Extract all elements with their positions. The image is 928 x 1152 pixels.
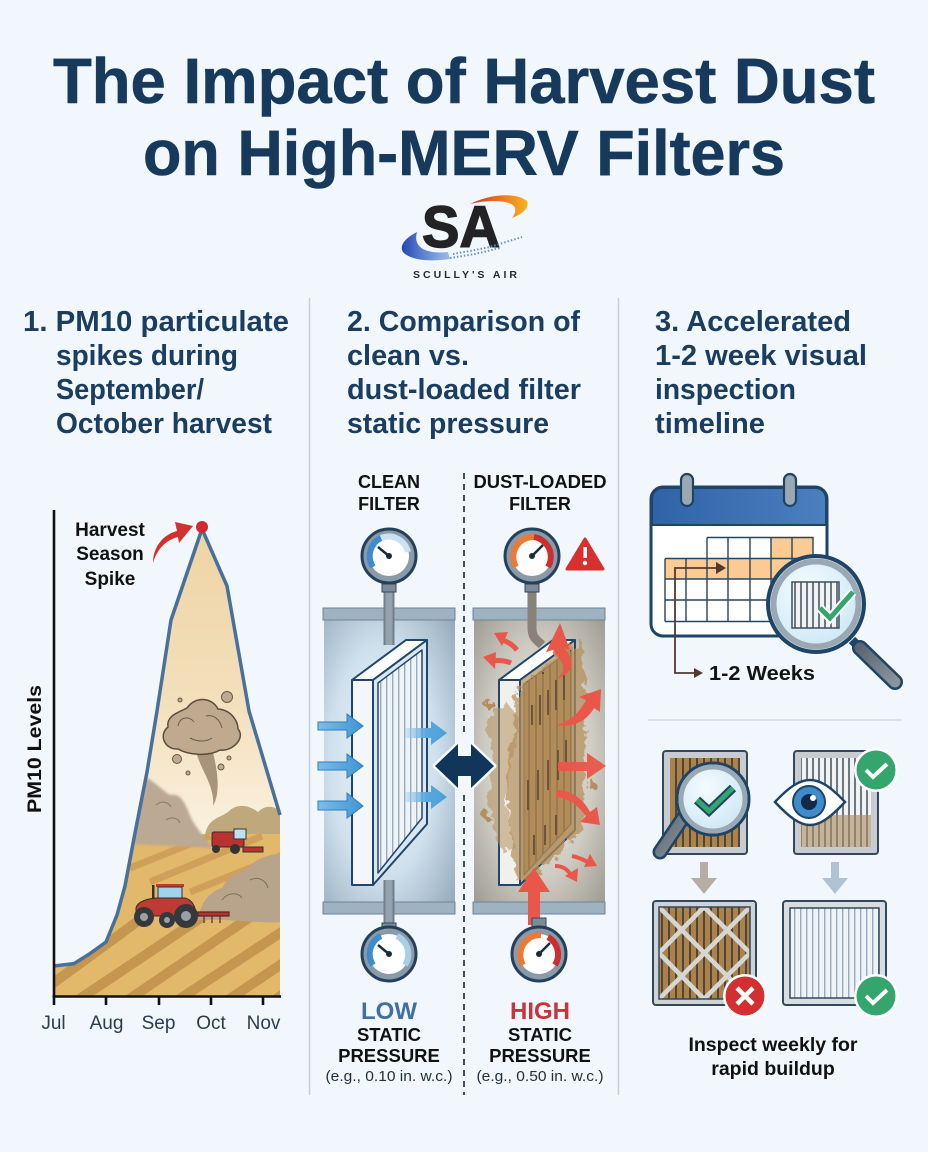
label: clean filter: FILTER [358,494,420,514]
axes [52,510,281,1005]
heading: column 2 [347,306,581,440]
icon: check badge [854,748,898,792]
double arrow: comparison [435,744,494,788]
clean filter [352,640,427,885]
gauge: clean bottom [362,923,416,981]
peak marker [196,521,208,533]
month labels: Jul [41,1013,66,1034]
label: low static pressure [326,998,452,1085]
label: low static pressure: LOW [361,998,417,1025]
icon: magnifier with filter [768,556,895,682]
column dividers [310,298,618,1095]
label: high static pressure: HIGH [510,998,570,1025]
timeline arrow [675,562,726,678]
month labels: Nov [247,1013,281,1034]
icon: filter with eye [775,751,878,854]
heading: column 3 [655,306,867,440]
dust on filter [482,640,596,880]
month labels: Oct [196,1013,226,1034]
caption: inspect weekly: rapid buildup [711,1058,835,1080]
combine harvester [212,829,263,854]
heading: column 3: 1-2 week visual [655,340,867,372]
label: dust-loaded filter [474,472,606,514]
y-axis label: PM10 Levels [25,685,46,813]
heading: column 3: timeline [655,408,765,440]
arrows: airflow out, clean [405,721,447,809]
icon: clogged filter [653,901,756,1005]
dashed divider [463,473,465,1095]
heading: column 3: inspection [655,374,796,406]
label: low static pressure: PRESSURE [338,1045,440,1066]
arrow: dirty down [691,862,717,894]
label: dust-loaded filter: FILTER [509,494,571,514]
title [53,45,875,189]
panel: inspection timeline [648,306,902,1080]
gauge pipes [384,590,394,930]
dirty filter [499,640,575,885]
label: high static pressure: PRESSURE [489,1045,591,1066]
callout: harvest season spike: Season [76,544,144,565]
label: dust-loaded filter: DUST-LOADED [474,472,606,492]
callout: harvest season spike [75,520,146,590]
arrows: turbulent airflow, dirty [483,623,606,925]
month labels: Aug [90,1013,123,1034]
icon: dirty filter with magnifier [660,751,749,854]
logo: Scully's Air: SA [422,195,500,260]
title: The Impact of Harvest Dust [53,45,875,117]
heading: column 1: spikes during [56,340,238,372]
clean duct [323,608,455,914]
heading: column 1: 1. PM10 particulate [23,306,289,338]
callout: harvest season spike: Spike [85,569,135,590]
arrow: clean down [822,862,848,894]
month labels: Sep [142,1013,175,1034]
gauge: clean top [362,529,416,592]
heading: column 1: September/ [56,374,204,406]
heading: column 1: October harvest [56,408,272,440]
icon: clean filter [783,901,886,1005]
label: clean filter [358,472,420,514]
logo: Scully's Air: SCULLY'S AIR [413,269,517,281]
icon: warning triangle [567,539,603,569]
title: on High-MERV Filters [143,117,785,189]
label: clean filter: CLEAN [358,472,420,492]
arrows: airflow in, clean [318,714,363,818]
chart line [54,529,280,966]
label: low static pressure: STATIC [357,1024,421,1045]
panel: static pressure comparison [318,306,606,1095]
dust cloud: behind tractor [198,854,282,922]
caption: inspect weekly [688,1034,858,1080]
icon: fail badge [723,974,767,1018]
callout: harvest season spike: Harvest [75,520,146,541]
panel: PM10 harvest spike [23,306,310,1034]
dust cloud: left behind combine [133,778,213,848]
heading: column 2: static pressure [347,408,549,440]
icon: calendar [651,474,827,636]
chart: filled PM10 area with harvest scene [55,534,280,996]
label: low static pressure: (e.g., 0.10 in. w.c.) [326,1068,452,1085]
tractor with plough [134,884,229,928]
arrow: to peak [153,522,193,563]
gauge: dirty top [505,529,559,592]
heading: column 3: 3. Accelerated [655,306,851,338]
label: 1-2 weeks: 1-2 Weeks [709,663,815,685]
heading: column 2: clean vs. [347,340,469,372]
heading: column 1 [23,306,289,440]
heading: column 2: 2. Comparison of [347,306,580,338]
label: high static pressure: STATIC [508,1024,572,1045]
icon: pass badge [854,974,898,1018]
gauge: dirty bottom [512,918,566,981]
section divider [648,719,902,721]
label: high static pressure [476,998,604,1085]
caption: inspect weekly: Inspect weekly for [688,1034,858,1056]
dust plume [163,692,240,806]
label: high static pressure: (e.g., 0.50 in. w.c.) [476,1068,604,1085]
heading: column 2: dust-loaded filter [347,374,581,406]
dirty duct [473,608,605,914]
month labels [41,1013,281,1034]
logo: Scully's Air [402,195,528,281]
